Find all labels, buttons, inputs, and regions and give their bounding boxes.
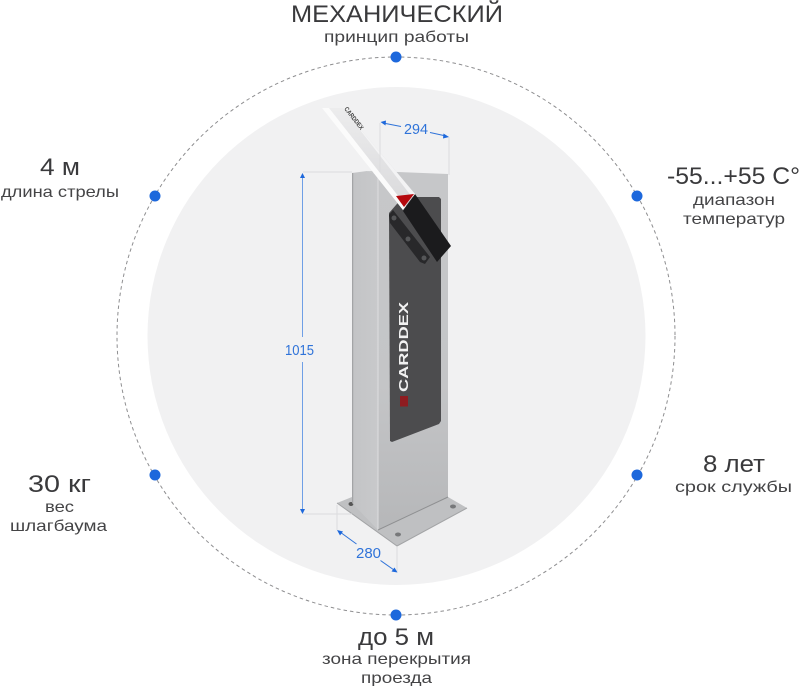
stat: weight: шлагбаума <box>10 518 107 535</box>
white boom <box>322 108 415 210</box>
dimension: height 1015: 1015 <box>285 343 314 359</box>
title <box>291 0 503 46</box>
mounting bracket <box>389 210 430 264</box>
barrier product illustration <box>322 106 467 546</box>
brand emblem <box>400 396 408 406</box>
dimension: height 1015 <box>285 172 352 514</box>
post front face <box>367 171 448 530</box>
stat: coverage zone: до 5 м <box>358 624 434 651</box>
panel brand: CARDDEX <box>397 301 411 392</box>
stat: boom length <box>1 154 119 201</box>
stat: boom length: 4 м <box>40 154 80 181</box>
dimension: base depth 280: 280 <box>356 546 381 562</box>
stat: temperature range: температур <box>683 211 785 228</box>
background circle <box>148 87 646 585</box>
stat: boom length: длина стрелы <box>1 184 119 201</box>
stat: temperature range: -55...+55 C° <box>667 163 800 190</box>
boom brand: CARDDEX <box>342 106 365 132</box>
stat: service life: срок службы <box>675 479 792 496</box>
red reflector <box>396 194 414 207</box>
title: принцип работы <box>324 29 469 46</box>
base plate <box>337 497 467 546</box>
stat: coverage zone: зона перекрытия <box>322 651 471 668</box>
stat: coverage zone <box>322 624 471 686</box>
title: МЕХАНИЧЕСКИЙ <box>291 0 503 28</box>
stat: weight <box>10 471 107 535</box>
dashed orbit ring <box>117 57 675 615</box>
stat: weight: 30 кг <box>28 471 91 498</box>
dimension: arm offset 294: 294 <box>404 122 428 138</box>
stat: service life <box>675 451 792 496</box>
post side face <box>352 171 378 530</box>
stat: service life: 8 лет <box>703 451 765 478</box>
dimension: arm offset 294 <box>380 120 449 175</box>
stat: temperature range: диапазон <box>693 192 775 209</box>
dark panel <box>389 197 441 442</box>
black housing <box>403 194 451 262</box>
stat: temperature range <box>667 163 800 228</box>
orbit markers <box>150 52 642 620</box>
dimension: base depth 280 <box>337 505 398 572</box>
stat: weight: вес <box>45 499 74 516</box>
